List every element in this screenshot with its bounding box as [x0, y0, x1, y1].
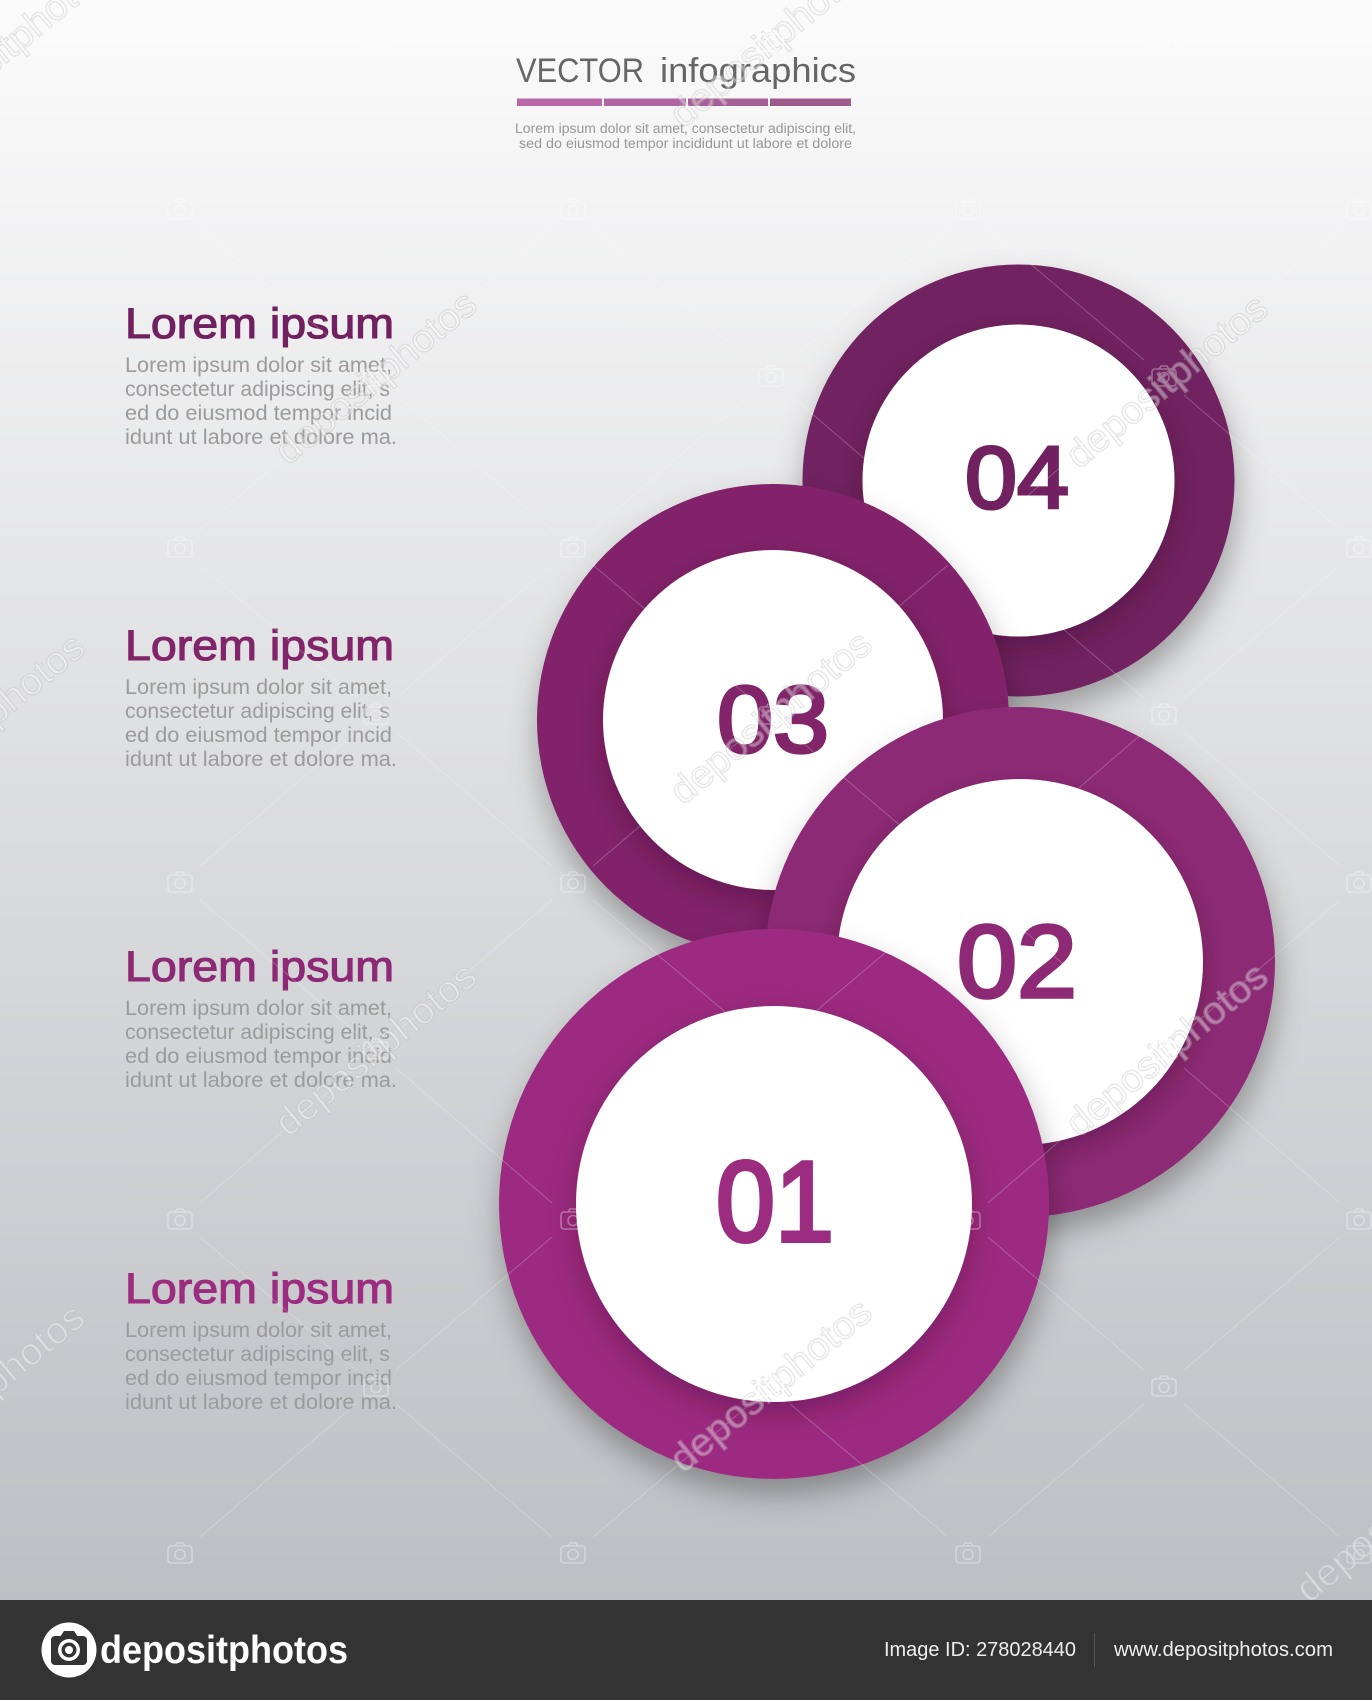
- title block: [515, 52, 856, 151]
- circle 02: [765, 707, 1275, 1217]
- subtitle: sed do eiusmod tempor incididunt ut labore et dolore: [519, 136, 852, 151]
- body: [125, 676, 397, 771]
- body: idunt ut labore et dolore ma.: [125, 1391, 397, 1414]
- body: ed do eiusmod tempor incid: [125, 402, 392, 425]
- text block 01: [125, 1265, 397, 1414]
- body: [125, 1319, 397, 1414]
- body: [125, 997, 397, 1092]
- text block 03: [125, 622, 397, 771]
- body: consectetur adipiscing elit, s: [125, 1021, 390, 1044]
- title: infographics: [660, 52, 856, 90]
- circle 04: 04: [965, 428, 1069, 527]
- heading: Lorem ipsum: [125, 943, 394, 991]
- watermark overlay: depositphotos: [662, 623, 880, 813]
- title: VECTOR: [516, 52, 644, 90]
- body: ed do eiusmod tempor incid: [125, 1367, 392, 1390]
- body: ed do eiusmod tempor incid: [125, 1045, 392, 1068]
- title rule: [517, 98, 851, 106]
- icon: camera logo: [42, 1622, 96, 1678]
- heading: Lorem ipsum: [125, 300, 394, 348]
- circle 02: 02: [957, 904, 1077, 1019]
- heading: Lorem ipsum: [125, 1265, 394, 1313]
- text block 04: [125, 300, 397, 449]
- circle 04: [802, 264, 1234, 696]
- separator: [1094, 1633, 1095, 1667]
- text block 02: [125, 943, 397, 1092]
- body: consectetur adipiscing elit, s: [125, 378, 390, 401]
- circle 01: 01: [716, 1139, 834, 1266]
- circle 01: [499, 929, 1049, 1479]
- heading: Lorem ipsum: [125, 622, 394, 670]
- body: idunt ut labore et dolore ma.: [125, 748, 397, 771]
- site url: www.depositphotos.com: [1113, 1639, 1333, 1661]
- body: consectetur adipiscing elit, s: [125, 1343, 390, 1366]
- title: [516, 52, 856, 90]
- body: consectetur adipiscing elit, s: [125, 700, 390, 723]
- subtitle: [515, 121, 856, 151]
- watermark overlay: depositphotos: [267, 283, 485, 473]
- body: ed do eiusmod tempor incid: [125, 724, 392, 747]
- body: Lorem ipsum dolor sit amet,: [125, 354, 392, 377]
- circle 03: 03: [717, 667, 829, 773]
- watermark overlay: depositphotos: [1058, 287, 1276, 477]
- body: Lorem ipsum dolor sit amet,: [125, 1319, 392, 1342]
- body: idunt ut labore et dolore ma.: [125, 426, 397, 449]
- logo wordmark: depositphotos: [100, 1629, 348, 1672]
- subtitle: Lorem ipsum dolor sit amet, consectetur adipiscing elit,: [515, 121, 856, 136]
- image id: Image ID: 278028440: [884, 1639, 1076, 1661]
- body: Lorem ipsum dolor sit amet,: [125, 676, 392, 699]
- body: Lorem ipsum dolor sit amet,: [125, 997, 392, 1020]
- body: idunt ut labore et dolore ma.: [125, 1069, 397, 1092]
- watermark overlay: depositphotos: [1058, 955, 1276, 1145]
- watermark overlay: depositphotos: [267, 955, 485, 1145]
- footer bar: [0, 1600, 1372, 1700]
- circle 03: [537, 484, 1009, 956]
- body: [125, 354, 397, 449]
- watermark overlay: depositphotos: [662, 1291, 880, 1481]
